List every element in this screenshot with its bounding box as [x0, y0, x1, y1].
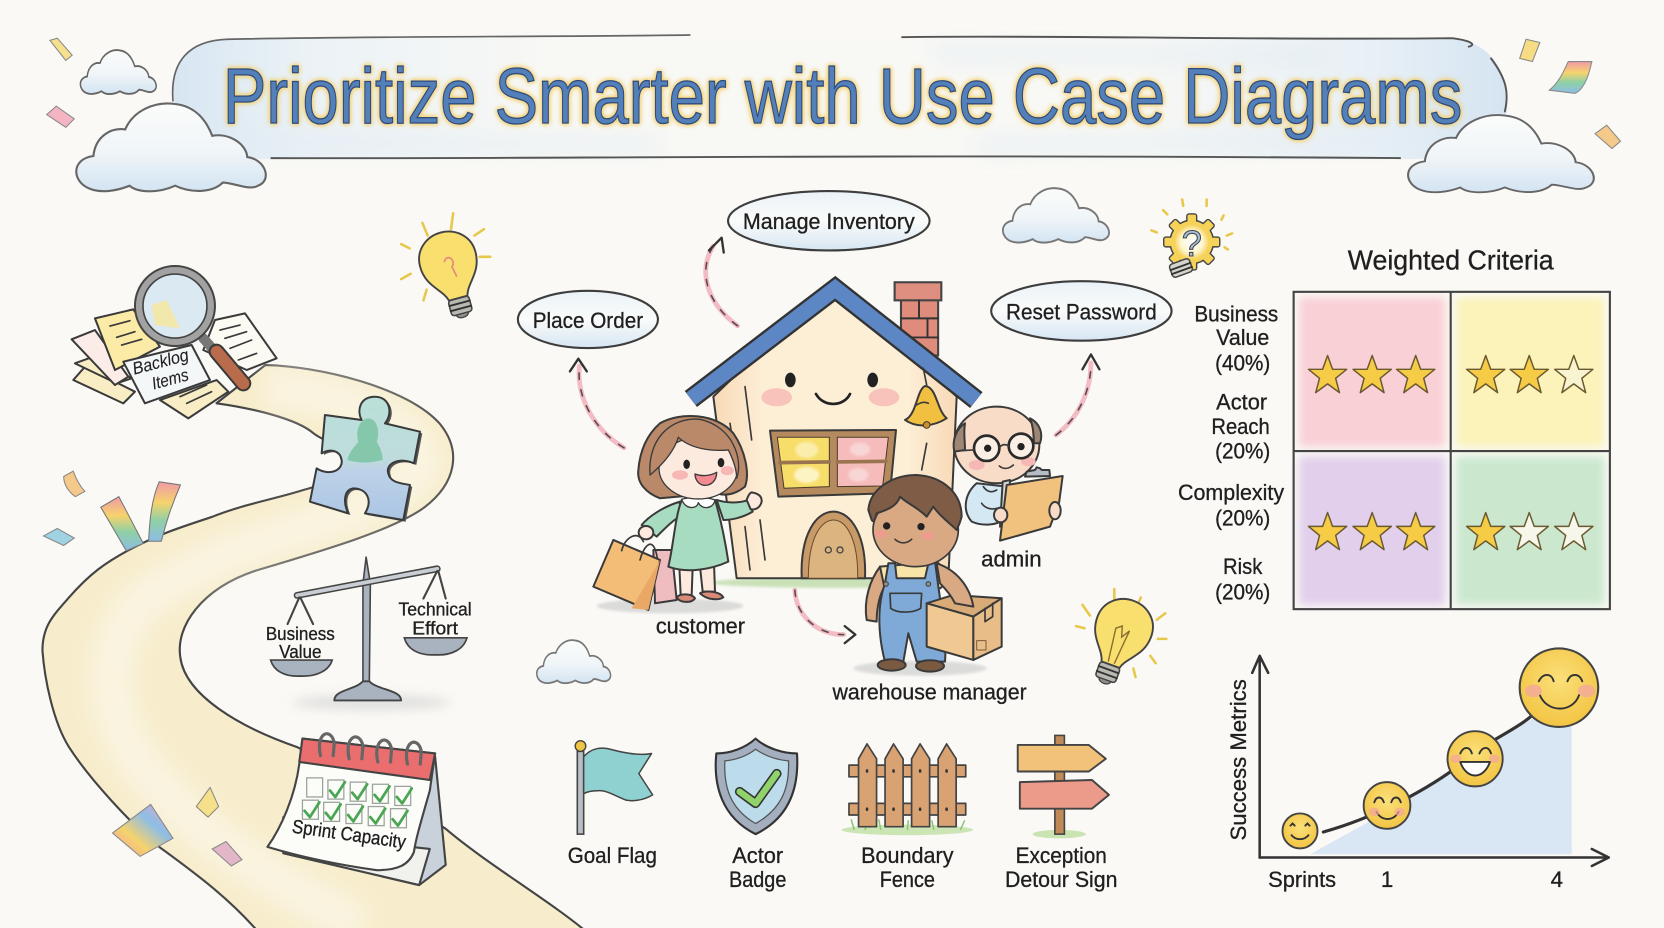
icon: exception detour sign [1005, 735, 1117, 892]
actor: admin [954, 407, 1063, 572]
trend line [1323, 709, 1539, 832]
lightbulb: top [401, 213, 491, 325]
card: backlog items: Backlog [130, 344, 191, 379]
x axis labels: Sprints [1268, 867, 1336, 892]
label: admin: admin [981, 547, 1042, 572]
label: sprint capacity: Sprint Capacity [291, 817, 407, 853]
matrix grid [1294, 292, 1610, 609]
panel: weighted criteria [1178, 245, 1610, 609]
house face [761, 373, 899, 406]
criteria labels: (20%) [1215, 505, 1270, 530]
arrow: admin to reset password [1056, 354, 1099, 435]
stars: bottom left 3 of 3 [1308, 513, 1435, 550]
cloud: lower small [537, 640, 611, 683]
use case: reset password [991, 281, 1172, 341]
box [927, 595, 1002, 660]
cloud: top left small [80, 50, 156, 94]
criteria labels: Actor [1216, 390, 1268, 415]
use case: place order: Place Order [533, 308, 644, 333]
gear question icon [1151, 200, 1232, 278]
y axis label: Success Metrics [1226, 679, 1251, 840]
label: exception detour sign: Detour Sign [1005, 867, 1117, 892]
actor: customer [593, 416, 762, 639]
cloud: middle [1003, 188, 1109, 243]
label: boundary fence: Fence [880, 867, 935, 892]
label: technical effort: Effort [412, 619, 458, 639]
criteria labels: Risk [1223, 554, 1263, 579]
label: exception detour sign: Exception [1016, 843, 1107, 868]
label: technical effort: Technical [398, 600, 472, 620]
label: actor badge: Actor [732, 843, 784, 868]
cloud: top right large [1408, 115, 1594, 192]
use case: manage inventory: Manage Inventory [743, 209, 916, 234]
label: technical effort [398, 600, 472, 639]
lightbulb: lower right [1076, 589, 1166, 693]
label: actor badge [729, 843, 786, 892]
criteria labels: Value [1216, 325, 1269, 350]
arrow: admin to manage inventory [706, 238, 738, 326]
puzzle piece [310, 397, 422, 522]
label: business value: Business [266, 624, 335, 644]
bell [905, 368, 947, 428]
door [802, 512, 865, 578]
magnifier [135, 266, 243, 383]
arrow: warehouse manager [795, 590, 855, 643]
stars: top right 2 of 3 [1467, 356, 1593, 393]
smiley 2 [1364, 782, 1410, 829]
x axis labels [1268, 867, 1563, 892]
axes [1252, 656, 1609, 866]
criteria labels: (40%) [1215, 350, 1270, 375]
balance scale [266, 557, 472, 710]
criteria labels [1178, 302, 1285, 605]
heading: weighted criteria: Weighted Criteria [1348, 245, 1554, 276]
icon: boundary fence [842, 744, 973, 892]
chart: success metrics [1226, 648, 1609, 892]
x axis labels: 4 [1551, 867, 1563, 892]
calendar: sprint capacity [267, 734, 446, 885]
card: backlog items [123, 344, 210, 403]
criteria labels: Reach [1211, 414, 1270, 439]
icon: goal flag [568, 741, 657, 868]
arrow: customer to place order [570, 359, 624, 448]
stars: bottom right 1 of 3 [1467, 513, 1593, 550]
card: backlog items: Items [149, 364, 191, 393]
smiley 1 [1282, 813, 1318, 848]
label: exception detour sign [1005, 843, 1117, 892]
stars: top left 3 of 3 [1308, 356, 1435, 393]
ribbons [101, 482, 180, 551]
icon: actor badge [716, 739, 797, 892]
criteria labels: Business [1194, 302, 1278, 327]
criteria labels: (20%) [1215, 580, 1270, 605]
label: boundary fence [861, 843, 954, 892]
criteria labels: Complexity [1178, 480, 1285, 505]
criteria labels: (20%) [1215, 438, 1270, 463]
label: boundary fence: Boundary [861, 843, 954, 868]
window [770, 430, 896, 497]
use case: place order [518, 291, 658, 348]
actor: warehouse manager [832, 475, 1027, 704]
backlog papers and magnifier [72, 266, 277, 418]
label: business value: Value [279, 642, 322, 662]
use case: manage inventory [728, 191, 930, 250]
x axis labels: 1 [1381, 867, 1393, 892]
title banner [173, 35, 1507, 159]
gear question icon: ? [1182, 223, 1202, 264]
house [691, 280, 976, 588]
label: customer: customer [656, 614, 746, 639]
area under curve [1311, 700, 1572, 854]
label: warehouse manager: warehouse manager [832, 679, 1027, 704]
label: business value [266, 624, 335, 662]
use case: reset password: Reset Password [1006, 299, 1157, 324]
label: actor badge: Badge [729, 867, 786, 892]
cloud: top left large [76, 103, 266, 191]
chimney [895, 282, 941, 356]
winding road [42, 365, 589, 928]
smiley 4 [1520, 648, 1598, 727]
matrix cells [1299, 297, 1605, 605]
label: goal flag: Goal Flag [568, 843, 657, 868]
smiley 3 [1448, 731, 1503, 786]
